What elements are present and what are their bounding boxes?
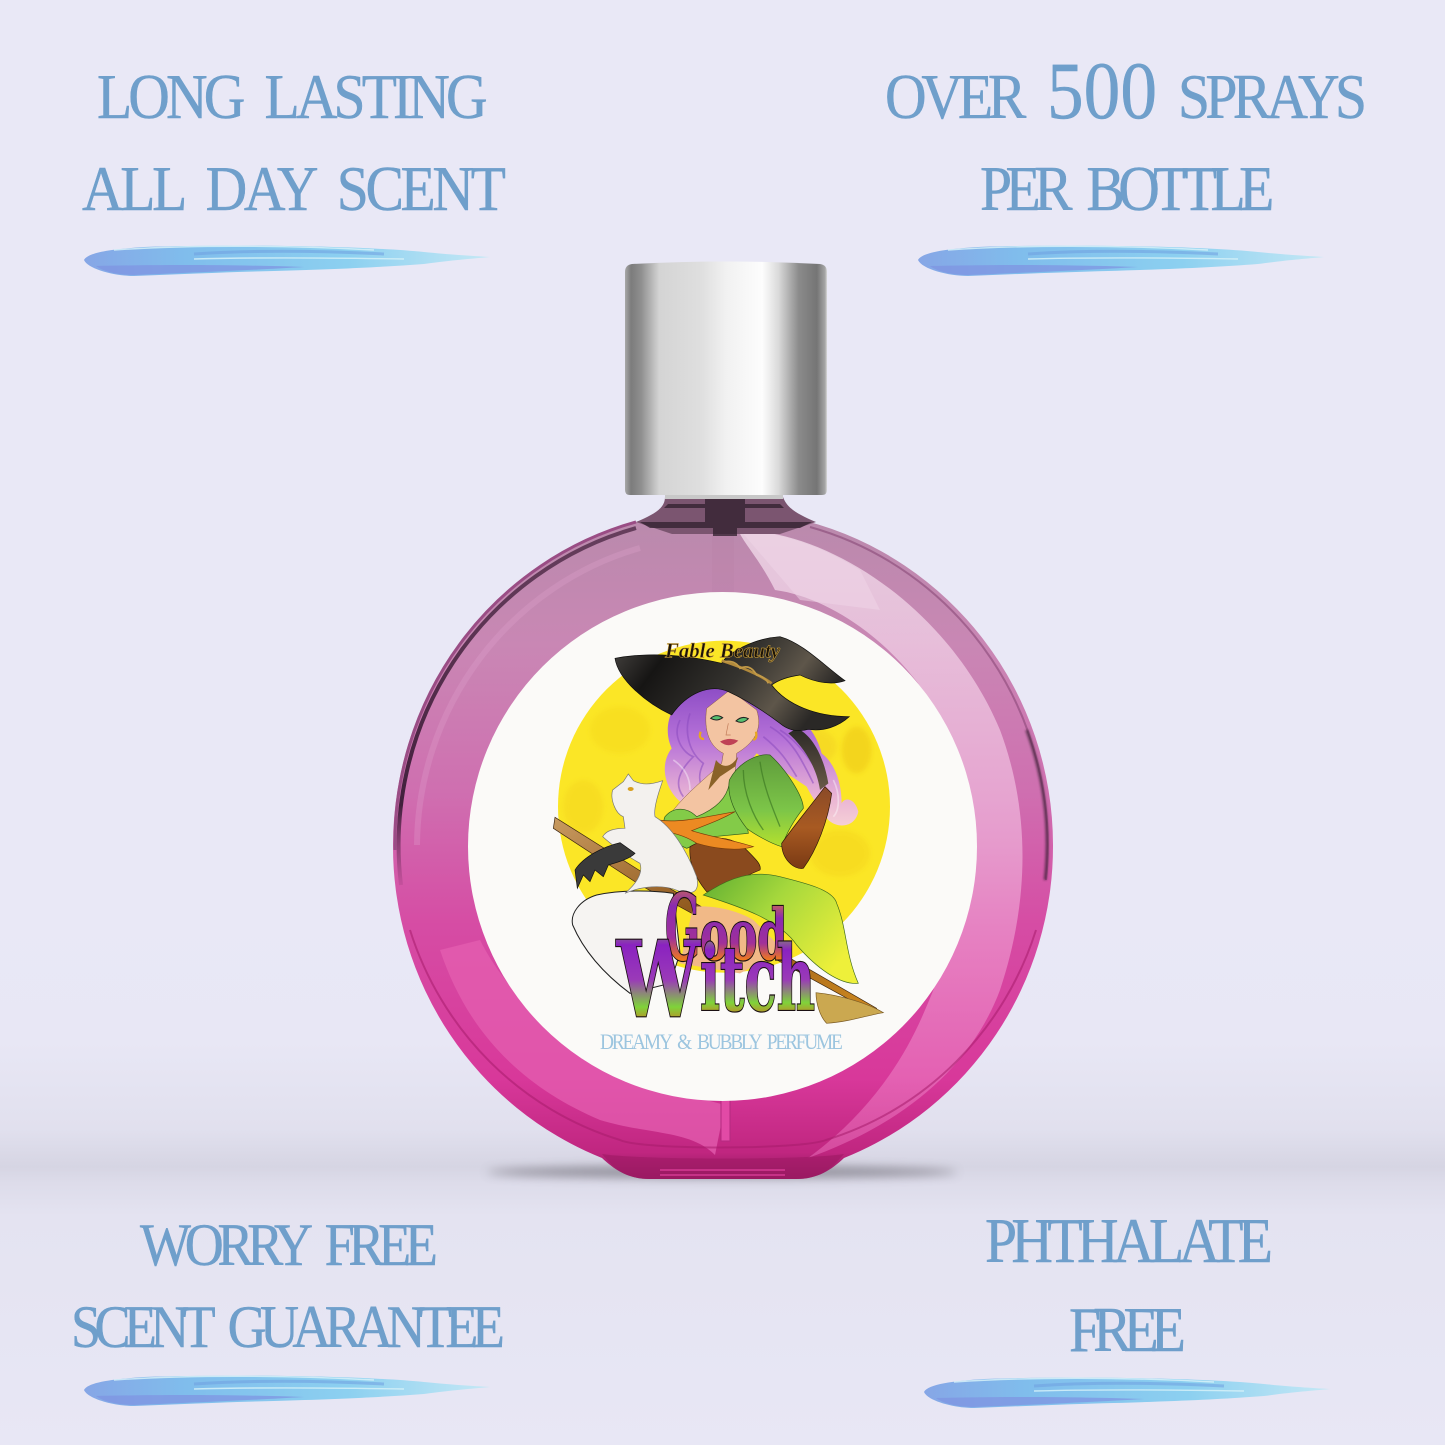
neck — [636, 497, 816, 534]
callout: over 500 sprays — [885, 45, 1367, 276]
heading: phthalate free: FREE — [1069, 1295, 1186, 1366]
title: good witch: ood — [700, 893, 787, 976]
label — [468, 592, 977, 1101]
floor shadow — [0, 900, 1445, 1445]
face features — [700, 716, 756, 745]
bottle body — [393, 512, 1053, 1179]
heading: long lasting all day scent: LONG LASTING — [97, 62, 488, 133]
witch hat — [615, 637, 849, 731]
title: good witch: G — [665, 873, 700, 981]
title: good witch: W — [616, 918, 701, 1042]
heading: worry free scent guarantee: SCENT GUARANTEE — [71, 1294, 505, 1361]
heading: over 500 sprays per bottle: PER BOTTLE — [980, 154, 1274, 225]
heading: over 500 sprays per bottle: 500 — [1047, 45, 1157, 136]
heading: long lasting all day scent — [82, 62, 506, 225]
lower tube — [721, 1100, 730, 1141]
white cat — [603, 774, 698, 893]
white leg — [572, 891, 680, 993]
brush stroke underline — [918, 246, 1324, 276]
bare thigh — [680, 906, 783, 973]
sleeve — [729, 755, 803, 847]
heading: over 500 sprays per bottle: OVER — [885, 62, 1027, 133]
glass rim lines — [395, 522, 1048, 1179]
heading: worry free scent guarantee — [71, 1212, 505, 1361]
title: good witch: itch — [700, 927, 815, 1032]
green bodice — [664, 783, 748, 848]
heading: over 500 sprays per bottle — [885, 45, 1367, 225]
collar — [665, 494, 783, 499]
broom — [553, 817, 883, 1023]
callout: worry free — [71, 1212, 505, 1406]
spray tube — [712, 535, 734, 592]
callout: phthalate free — [924, 1206, 1330, 1408]
sash — [623, 812, 753, 849]
label tagline: DREAMY & BUBBLY PERFUME — [600, 1031, 843, 1054]
callout: long lasting — [82, 62, 506, 276]
sleeve folds — [743, 762, 780, 830]
hair strands — [677, 713, 817, 797]
black glove — [575, 843, 635, 888]
title: good witch — [616, 873, 815, 1042]
skirt — [703, 874, 858, 983]
heading: long lasting all day scent: ALL DAY SCENT — [82, 154, 506, 225]
glove arm — [782, 787, 832, 868]
silver cap — [625, 262, 827, 495]
corset — [690, 838, 760, 892]
face and chest — [673, 690, 759, 820]
perfume bottle — [393, 262, 1053, 1179]
brush stroke underline — [84, 246, 490, 276]
neck shadows — [640, 497, 812, 536]
heading: over 500 sprays per bottle: SPRAYS — [1178, 62, 1367, 133]
heading: worry free scent guarantee: WORRY FREE — [140, 1212, 438, 1279]
yellow moon — [558, 641, 890, 973]
brush stroke underline — [924, 1378, 1330, 1408]
arc text: fable beauty: Fable Beauty — [664, 640, 781, 662]
raised hand holding hat — [788, 728, 828, 790]
label art: witch illustration — [553, 637, 890, 1042]
heading: phthalate free — [985, 1206, 1273, 1366]
brush stroke underline — [84, 1376, 490, 1406]
hair — [665, 683, 858, 825]
glass highlights — [417, 530, 1022, 1158]
heading: phthalate free: PHTHALATE — [985, 1206, 1273, 1277]
necklace — [708, 757, 738, 790]
